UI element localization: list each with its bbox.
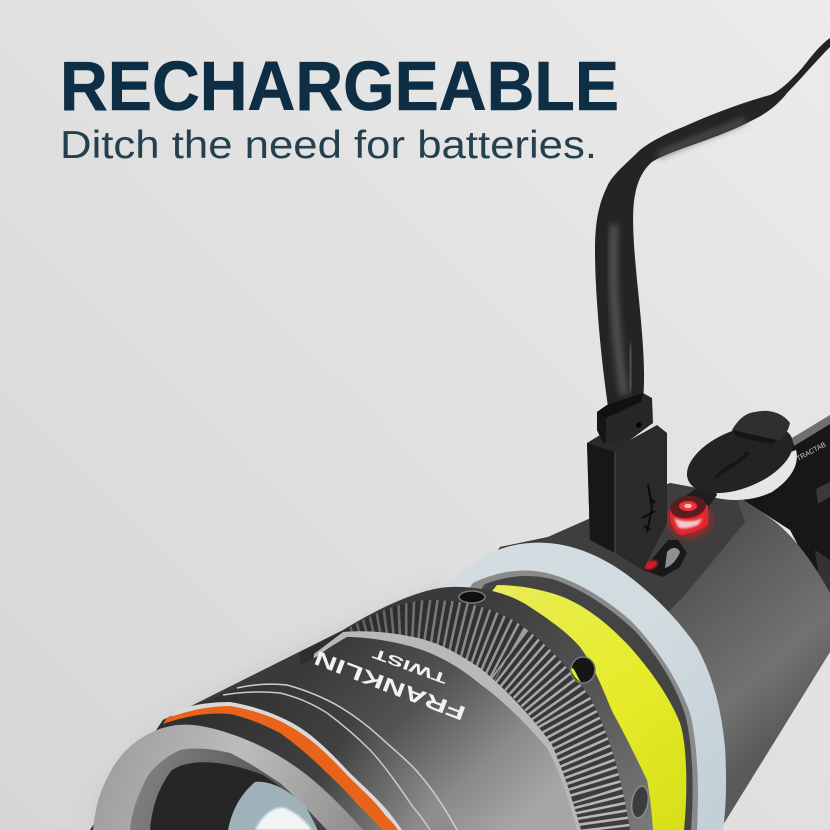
- red charging indicator: [666, 494, 712, 538]
- title: RECHARGEABLE: [60, 47, 619, 125]
- subtitle: Ditch the need for batteries.: [60, 124, 597, 167]
- soft shadow under flashlight: [90, 583, 450, 830]
- USB logo: [642, 484, 655, 532]
- lens highlight: [255, 807, 312, 830]
- barrel groove band: [90, 684, 457, 830]
- charging port: [643, 540, 687, 577]
- rear tube: [735, 415, 830, 605]
- lens interior: [150, 762, 320, 830]
- brand text: TWIST: [370, 645, 449, 687]
- lens front rim: [93, 725, 363, 830]
- lens inner wall: [130, 749, 327, 830]
- USB cable: [595, 38, 830, 407]
- barrel groove line one: [237, 684, 457, 830]
- yellow lens ring: [300, 585, 686, 830]
- brand text: [312, 645, 469, 724]
- brand text: FRANKLIN: [312, 646, 469, 724]
- inner lens reflector: [228, 782, 318, 830]
- inner ring shadow: [300, 576, 693, 830]
- cable highlights: [613, 225, 624, 395]
- orange band: [90, 706, 398, 830]
- silver bezel line: [90, 702, 402, 830]
- grub screw holes: [459, 591, 651, 819]
- head barrel: [90, 637, 577, 830]
- rubber port cap: [677, 411, 803, 509]
- darker anodized panel: [500, 483, 745, 640]
- tube marking: TRACTAB: [796, 441, 828, 463]
- knurled grip band: [300, 590, 640, 830]
- barrel front silver edge: [300, 631, 581, 830]
- main body: [300, 483, 830, 830]
- silver inner ring: [300, 570, 698, 830]
- dark front band: [90, 713, 383, 830]
- white seal ring: [300, 543, 726, 830]
- USB plug: [587, 393, 667, 570]
- barrel groove line two: [223, 692, 430, 830]
- head collar: [90, 587, 653, 830]
